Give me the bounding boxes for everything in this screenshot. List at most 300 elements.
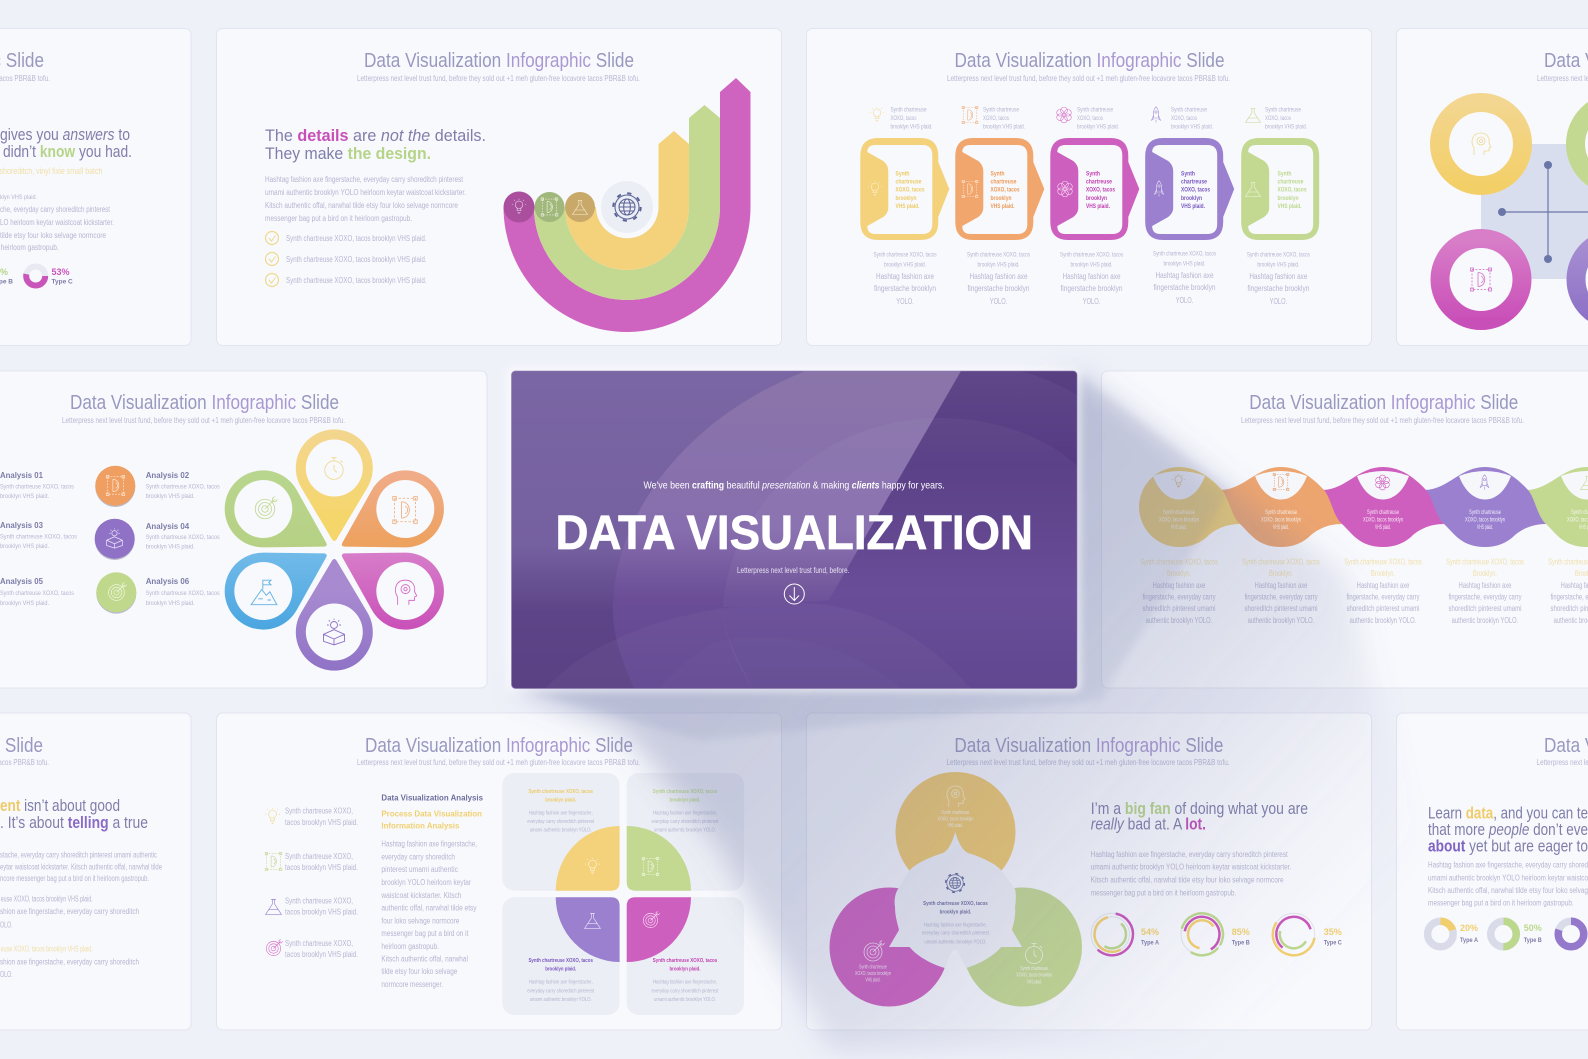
body text: stache, everyday carry shoreditch pinterest umami authentic	[0, 850, 157, 860]
analysis 02: brooklyn VHS plaid.	[146, 493, 195, 500]
analysis 05: brooklyn VHS plaid.	[0, 600, 49, 607]
title: Data Visualization Infographic Slide	[954, 50, 1224, 72]
headline: They make the design.	[265, 145, 431, 163]
panel: centre title slide	[507, 367, 1081, 692]
analysis body text: everyday carry shoreditch	[381, 852, 455, 862]
body text: Hashtag fashion axe fingerstache, everyday carry shoreditch pinterest	[265, 175, 464, 184]
bottom notes: brooklyn VHS plaid.	[1070, 262, 1113, 268]
frame 3: magenta: VHS plaid.	[1086, 203, 1110, 210]
lobe: orange: VHS plaid.	[1273, 525, 1289, 531]
subtitle: Letterpress next level trust fund, before.	[737, 565, 849, 575]
subtitle: Letterpress next level trust fund, before they sold out +1 meh gluten-free locavore tacos PBR&B tofu.	[947, 73, 1230, 83]
wave captions: authentic brooklyn YOLO.	[1248, 616, 1314, 625]
icon list: Synth chartreuse XOXO,	[285, 939, 353, 948]
subtitle: Letterpress next level trust fund, before they sold out +1 meh gluten-free locavore tacos PBR&B tofu.	[357, 73, 640, 83]
bottom notes: YOLO.	[990, 297, 1007, 306]
body text	[0, 194, 114, 252]
headline	[1428, 804, 1588, 856]
quadrant: top right: Synth chartreuse XOXO, tacos	[653, 789, 717, 795]
body text: heirloom gastropub.	[1, 243, 59, 252]
body text	[0, 850, 162, 979]
icon: stopwatch	[1026, 944, 1042, 964]
petal: green	[211, 456, 346, 579]
venn labels: VHS plaid.	[866, 978, 880, 984]
headline: gives you answers to	[0, 126, 130, 144]
lobe: magenta	[1321, 467, 1444, 547]
analysis 06: Analysis 06	[146, 576, 189, 586]
analysis body text: tilde etsy four loko selvage	[381, 967, 458, 976]
quadrant: top left: umami authentic brooklyn YOLO.	[530, 827, 592, 833]
frame 2: orange: brooklyn	[990, 195, 1012, 202]
analysis body text	[381, 840, 477, 989]
analysis 05: Synth chartreuse XOXO, tacos	[0, 590, 75, 597]
analysis 03: Synth chartreuse XOXO, tacos	[0, 534, 78, 540]
analysis body text: Kitsch authentic offal, narwhal	[381, 954, 468, 964]
venn labels: VHS plaid.	[1027, 980, 1042, 986]
icon badge: bulb	[504, 192, 534, 222]
wave captions: Hashtag fashion axe	[1153, 581, 1206, 590]
frame 1: yellow: Synth	[896, 170, 910, 178]
ring chart: type C 35%: Type C	[1324, 940, 1342, 946]
quadrant: bottom right: everyday carry shoreditch pinterest	[652, 988, 719, 994]
title: Data Visualization Infographic Slide	[954, 735, 1223, 757]
analysis 02: Analysis 02	[146, 470, 189, 480]
bottom notes: fingerstache brooklyn	[874, 284, 936, 293]
ring: purple	[1576, 238, 1588, 320]
quadrant: top right	[627, 773, 744, 891]
top notes with icons: Synth chartreuse	[983, 106, 1019, 114]
top notes with icons: XOXO, tacos	[983, 115, 1010, 122]
wave captions: Brooklyn.	[1371, 569, 1395, 578]
analysis 04	[146, 521, 220, 550]
frame 4: purple	[1145, 138, 1234, 240]
bottom notes: brooklyn VHS plaid.	[884, 262, 926, 268]
icon list: Synth chartreuse XOXO,	[285, 852, 353, 861]
ring chart: type A 54%: 54%	[1141, 927, 1159, 937]
wave captions: Brooklyn.	[1473, 569, 1497, 578]
icon list: tacos brooklyn VHS plaid.	[285, 950, 358, 959]
wave captions: authentic brooklyn YOLO.	[1350, 616, 1416, 625]
quadrant: top left: everyday carry shoreditch pinterest	[527, 819, 595, 825]
donut chart: type A 20%: Type A	[1460, 937, 1478, 944]
quadrant: top left: Synth chartreuse XOXO, tacos	[528, 789, 593, 795]
wave captions: fingerstache, everyday carry	[1142, 592, 1216, 602]
top notes with icons: XOXO, tacos	[1265, 115, 1292, 122]
chart: nested arch arrows	[504, 78, 750, 332]
petal: magenta	[323, 521, 458, 644]
main title: DATA VISUALIZATION	[556, 507, 1033, 560]
analysis 04: Analysis 04	[146, 521, 189, 531]
quadrant: bottom right	[627, 897, 744, 1015]
ring: green	[1576, 102, 1588, 186]
quadrant: bottom right: umami authentic brooklyn YOLO.	[654, 997, 716, 1003]
lobe: magenta: XOXO, tacos brooklyn	[1363, 518, 1403, 524]
headline	[265, 127, 486, 163]
frame 3: magenta: chartreuse	[1086, 178, 1112, 186]
analysis body text: messenger bag put a bird on it	[381, 929, 469, 938]
icon: orange circle	[95, 466, 135, 507]
title: Data Visualization Infographic Slide	[364, 50, 634, 72]
lobe: purple: VHS plaid.	[1477, 525, 1493, 531]
yellow subheading: shoreditch, vinyl fixie small batch	[0, 166, 102, 176]
frame 3: magenta: brooklyn	[1086, 195, 1107, 202]
frame 5: green: VHS plaid.	[1278, 203, 1302, 210]
body text: euse XOXO, tacos brooklyn VHS plaid.	[1, 944, 93, 954]
bottom notes: fingerstache brooklyn	[1154, 283, 1216, 292]
venn labels: Synth chartreuse XOXO, tacos	[923, 901, 988, 907]
checklist: Synth chartreuse XOXO, tacos brooklyn VHS plaid.	[286, 276, 426, 285]
body text: LO heirloom keytar waistcoat kickstarter.	[0, 218, 114, 227]
panel: partial story slide, bottom left	[0, 713, 191, 1030]
subtitle: Letterpress next level trust fund, before they sold out +1 meh gluten-free locavore tacos PBR&B tofu.	[357, 757, 640, 767]
wave captions: Synth chartreuse XOXO, tacos	[1344, 558, 1422, 566]
quadrant: top right: Hashtag fashion axe fingerstache,	[653, 811, 717, 817]
lobe: yellow: Synth chartreuse	[1163, 510, 1195, 516]
wave captions: Hashtag fashion axe	[1459, 581, 1512, 590]
venn labels	[855, 810, 1052, 986]
ring chart: type C 35%: 35%	[1324, 927, 1342, 937]
bottom notes: YOLO.	[1176, 296, 1193, 305]
analysis 01: brooklyn VHS plaid.	[0, 493, 49, 500]
wave captions: fingerstache, everyday carry	[1244, 592, 1318, 602]
bottom notes: Hashtag fashion axe	[970, 272, 1028, 281]
body text: OLO.	[0, 920, 13, 930]
body text: tilde etsy four loko selvage normcore	[0, 231, 106, 240]
icon list: Synth chartreuse XOXO,	[285, 806, 353, 816]
top notes with icons: brooklyn VHS plaid.	[1171, 124, 1213, 130]
petal: purple	[296, 559, 373, 671]
lobe: magenta: Synth chartreuse	[1367, 510, 1399, 516]
frame 2: orange: XOXO, tacos	[990, 186, 1020, 194]
frame 2: orange	[955, 138, 1044, 240]
body text: Hashtag fashion axe fingerstache, everyday carry shoreditch pinterest	[1091, 850, 1288, 859]
checklist: Synth chartreuse XOXO, tacos brooklyn VHS plaid.	[286, 255, 426, 264]
analysis subheading	[381, 809, 482, 831]
quadrant: top left	[502, 773, 620, 891]
frame 2: orange: VHS plaid.	[990, 203, 1015, 210]
top notes with icons	[870, 106, 1307, 130]
bottom notes: Synth chartreuse XOXO, tacos	[1153, 250, 1217, 258]
wave captions: Synth chartreuse XOXO, tacos	[1446, 558, 1524, 566]
petal: yellow	[296, 429, 373, 541]
quadrant: bottom left	[502, 897, 620, 1015]
analysis body text: Hashtag fashion axe fingerstache,	[381, 840, 477, 848]
body text: shion axe fingerstache, everyday carry shoreditch	[0, 907, 139, 916]
icon: purple circle	[95, 519, 135, 560]
body text: shion axe fingerstache, everyday carry shoreditch	[0, 958, 139, 966]
top notes with icons: brooklyn VHS plaid.	[1077, 124, 1119, 130]
wave captions: Brooklyn.	[1269, 569, 1293, 578]
icon list: tacos brooklyn VHS plaid.	[285, 818, 358, 827]
panel: four quadrant slide	[216, 713, 782, 1030]
headline: didn’t know you had.	[3, 143, 132, 161]
bottom notes: YOLO.	[896, 297, 914, 306]
frame 5: green	[1241, 138, 1319, 240]
quadrant: bottom right: brooklyn plaid.	[670, 966, 701, 972]
frame 4: purple: XOXO, tacos	[1181, 186, 1210, 194]
centre overlap	[889, 832, 1022, 968]
body text: che, everyday carry shoreditch pinterest	[0, 205, 111, 214]
ring chart: type A 54%	[1088, 910, 1159, 959]
donut chart: type B 50%: 50%	[1524, 923, 1542, 933]
quadrant: top right: brooklyn plaid.	[670, 798, 701, 804]
frame 1: yellow: chartreuse	[896, 178, 922, 186]
wave captions: Hashtag fashion axe	[1255, 581, 1308, 590]
body text: klyn VHS plaid.	[0, 194, 37, 201]
bottom notes: Synth chartreuse XOXO, tacos	[1060, 252, 1124, 258]
headline: The details are not the details.	[265, 127, 486, 145]
analysis body text: waistcoat kickstarter. Kitsch	[381, 891, 461, 900]
top notes with icons: Synth chartreuse	[1077, 106, 1113, 114]
cross diagram	[1481, 144, 1588, 279]
body text: messenger bag put a bird on it heirloom gastropub.	[265, 214, 412, 223]
donut chart 53%	[0, 266, 73, 286]
top notes with icons: XOXO, tacos	[1077, 115, 1104, 122]
venn labels: XOXO, tacos brooklyn	[937, 816, 974, 822]
frame 5: green: XOXO, tacos	[1278, 186, 1307, 194]
donut chart: type B 50%	[1491, 921, 1542, 947]
analysis subheading: Process Data Visualization	[381, 809, 482, 819]
analysis 04: Synth chartreuse XOXO, tacos	[146, 534, 220, 541]
top notes with icons: brooklyn VHS plaid.	[983, 124, 1025, 130]
panel: partial slide, top left	[0, 28, 191, 346]
wave captions: fingerstache, everyday carry	[1448, 592, 1522, 602]
quadrant: bottom right: Synth chartreuse XOXO, tacos	[653, 958, 717, 964]
title: Data Visualization Infographic Slide	[365, 735, 633, 757]
wave captions: Brooklyn.	[1167, 569, 1191, 578]
frame 1: yellow: brooklyn	[896, 195, 917, 202]
panel: partial learn data slide, bottom right	[1396, 713, 1588, 1030]
wave captions: Synth chartreuse XOXO, tacos	[1140, 558, 1218, 566]
body text: Kitsch authentic offal, narwhal tilde etsy four loko selvage normcore	[265, 201, 458, 210]
frame 3: magenta	[1050, 138, 1139, 240]
body text: umami authentic brooklyn YOLO heirloom keytar waistcoat kickstarter.	[265, 188, 466, 197]
donut chart: purple	[1558, 921, 1584, 947]
panel: five step frames slide	[806, 28, 1372, 346]
bottom notes	[874, 250, 1310, 306]
wave captions: shoreditch pinterest umami	[1346, 604, 1420, 613]
analysis 04: brooklyn VHS plaid.	[146, 544, 195, 550]
analysis 03: brooklyn VHS plaid.	[0, 543, 49, 550]
lobe: yellow	[896, 772, 1016, 892]
icon: gear globe	[946, 874, 964, 892]
venn labels: Hashtag fashion axe fingerstache,	[924, 922, 987, 928]
top notes with icons: brooklyn VHS plaid.	[1265, 124, 1307, 130]
quadrant: top left: Hashtag fashion axe fingerstache,	[529, 811, 593, 817]
wave captions: fingerstache, everyday carry	[1346, 592, 1420, 602]
venn labels: XOXO, tacos brooklyn	[1016, 973, 1052, 979]
background curves	[613, 371, 1077, 688]
analysis body text: pinterest umami authentic	[381, 865, 458, 874]
analysis 06: Synth chartreuse XOXO, tacos	[146, 590, 220, 597]
wave captions: authentic brooklyn YOLO.	[1146, 616, 1212, 625]
bottom notes: YOLO.	[1083, 297, 1100, 306]
lobe: yellow	[1139, 467, 1240, 547]
petal: blue	[211, 521, 346, 644]
headline	[1091, 800, 1308, 834]
analysis 02: Synth chartreuse XOXO, tacos	[146, 484, 220, 490]
bottom notes: Hashtag fashion axe	[1062, 272, 1121, 281]
bottom notes: Hashtag fashion axe	[876, 272, 934, 281]
headline: ent isn’t about good	[0, 797, 120, 815]
quadrant: top left: brooklyn plaid.	[545, 798, 577, 804]
headline	[0, 126, 132, 161]
analysis 01	[0, 470, 75, 500]
donut chart 53%: Type C	[52, 278, 73, 286]
frame 5: green: chartreuse	[1278, 178, 1304, 186]
bottom notes: Hashtag fashion axe	[1249, 272, 1308, 281]
quadrant: bottom left: Hashtag fashion axe fingerstache,	[529, 980, 593, 986]
headline: really bad at. A lot.	[1091, 816, 1206, 834]
body text: ncore messenger bag put a bird on it heirloom gastropub.	[0, 874, 149, 883]
bottom notes: Hashtag fashion axe	[1156, 271, 1214, 280]
analysis 03	[0, 520, 78, 550]
top notes with icons: XOXO, tacos	[890, 115, 917, 122]
quadrant: top right: everyday carry shoreditch pinterest	[652, 819, 719, 825]
top notes with icons: Synth chartreuse	[890, 106, 927, 114]
top notes with icons: XOXO, tacos	[1171, 115, 1198, 122]
donut chart 53%: 53%	[52, 267, 70, 277]
checklist	[266, 232, 426, 286]
panel: details arch slide	[216, 28, 782, 346]
lobe: orange: XOXO, tacos brooklyn	[1261, 518, 1301, 524]
ring chart: type B 85%	[1172, 905, 1250, 964]
donut chart: type A 20%	[1428, 921, 1478, 947]
petal: orange	[323, 456, 458, 579]
donut chart: type A 20%: 20%	[1460, 923, 1478, 933]
quadrant: top right: umami authentic brooklyn YOLO.	[654, 827, 716, 833]
title: Data Visualization Infographic Slide	[1249, 392, 1518, 414]
icon: target	[864, 940, 884, 961]
bottom notes: Synth chartreuse XOXO, tacos	[1247, 252, 1310, 258]
wave captions	[1140, 558, 1588, 625]
icon list: tacos brooklyn VHS plaid.	[285, 908, 358, 916]
lobe: orange: Synth chartreuse	[1265, 510, 1297, 516]
frame 3: magenta: XOXO, tacos	[1086, 186, 1115, 194]
icon badge: circuit	[534, 192, 564, 222]
quadrant: bottom left: Synth chartreuse XOXO, tacos	[528, 958, 593, 964]
panel: six petal analysis slide	[0, 371, 487, 688]
lobe: magenta: VHS plaid.	[1375, 525, 1391, 531]
quadrant: bottom left: umami authentic brooklyn YOLO.	[530, 997, 592, 1003]
ring chart: type B 85%: 85%	[1232, 927, 1250, 937]
cast shadow of centre slide	[514, 372, 1420, 1050]
chart: six petal pins	[211, 429, 458, 671]
frame 1: yellow: XOXO, tacos	[896, 186, 925, 194]
body text	[265, 175, 466, 223]
panel: venn slide	[806, 713, 1372, 1030]
quadrant: bottom left: brooklyn plaid.	[545, 966, 577, 972]
frame 5: green: brooklyn	[1278, 195, 1299, 202]
lobe: green	[1525, 467, 1588, 547]
frame 1: yellow: VHS plaid.	[896, 203, 920, 210]
icon: head	[947, 786, 965, 807]
wave captions: shoreditch pinterest umami	[1142, 604, 1216, 613]
lobe: green	[963, 888, 1082, 1006]
bottom notes: brooklyn VHS plaid.	[1257, 262, 1300, 268]
venn labels: Synth chartreuse	[941, 810, 970, 816]
subtitle: Letterpress next level trust fund, before they sold out +1 meh gluten-free locavore tacos PBR&B tofu.	[62, 415, 345, 425]
venn labels: umami authentic brooklyn YOLO.	[924, 939, 987, 945]
analysis 06	[146, 576, 220, 607]
venn labels: Synth chartreuse	[1020, 966, 1048, 972]
icon: down arrow circle	[784, 584, 804, 604]
analysis body text: brooklyn YOLO heirloom keytar	[381, 878, 471, 887]
analysis 01: Synth chartreuse XOXO, tacos	[0, 484, 75, 490]
ring: yellow	[1440, 102, 1522, 186]
body text: OLO.	[0, 970, 13, 979]
frame 5: green: Synth	[1278, 170, 1292, 178]
bottom notes: fingerstache brooklyn	[1247, 284, 1309, 293]
bottom notes: fingerstache brooklyn	[968, 284, 1030, 293]
frame 4: purple: chartreuse	[1181, 178, 1207, 186]
panel: wave slide	[1102, 371, 1588, 688]
bottom notes: brooklyn VHS plaid.	[1164, 260, 1206, 268]
headline	[0, 797, 148, 832]
analysis body text: normcore messenger.	[381, 980, 443, 989]
analysis 03: Analysis 03	[0, 520, 43, 530]
lobe: purple	[1423, 467, 1546, 547]
venn labels: everyday carry shoreditch pinterest	[922, 931, 989, 937]
body text	[1091, 850, 1291, 897]
icon badge: gear globe	[601, 181, 653, 233]
ring chart: type C 35%	[1269, 910, 1342, 959]
quadrant: bottom right: Hashtag fashion axe fingerstache,	[653, 980, 717, 986]
wave captions: shoreditch pinterest umami	[1448, 604, 1522, 613]
venn labels: Synth chartreuse	[859, 964, 887, 970]
quadrant: bottom left: everyday carry shoreditch pinterest	[527, 988, 595, 994]
analysis body text: heirloom gastropub.	[381, 942, 439, 951]
body text: eytar waistcoat kickstarter. Kitsch authentic offal, narwhal tilde	[0, 862, 162, 872]
top notes with icons: Synth chartreuse	[1265, 106, 1301, 114]
venn labels: VHS plaid.	[948, 823, 963, 829]
ring: magenta	[1440, 238, 1522, 320]
bottom notes: Synth chartreuse XOXO, tacos	[874, 252, 937, 258]
icon badge: flask	[565, 192, 595, 222]
body text: Kitsch authentic offal, narwhal tilde etsy four loko selvage normcore	[1091, 875, 1284, 884]
checklist: Synth chartreuse XOXO, tacos brooklyn VHS plaid.	[286, 234, 426, 243]
subtitle: Letterpress next level trust fund, before they sold out +1 meh gluten-free locavore tacos PBR&B tofu.	[946, 757, 1230, 767]
analysis 02	[146, 470, 220, 500]
lobe: purple: XOXO, tacos brooklyn	[1465, 518, 1505, 524]
frame 4: purple: VHS plaid.	[1181, 203, 1205, 210]
lobe: purple: Synth chartreuse	[1469, 510, 1501, 516]
bottom notes: brooklyn VHS plaid.	[978, 262, 1020, 268]
tagline: We’ve been crafting beautiful presentation & making clients happy for years.	[644, 480, 945, 492]
wave captions: Synth chartreuse XOXO, tacos	[1242, 558, 1320, 566]
headline: I’m a big fan of doing what you are	[1091, 800, 1308, 818]
wave captions: authentic brooklyn YOLO.	[1452, 616, 1518, 625]
body text: euse XOXO, tacos brooklyn VHS plaid.	[1, 894, 93, 904]
lobe: yellow: XOXO, tacos brooklyn	[1159, 518, 1199, 524]
analysis body text: authentic offal, narwhal tilde etsy	[381, 904, 477, 912]
lobe: yellow: VHS plaid.	[1171, 525, 1187, 531]
lobe: magenta	[830, 888, 948, 1006]
frame 1: yellow	[860, 138, 949, 240]
analysis 01: Analysis 01	[0, 470, 43, 480]
analysis heading: Data Visualization Analysis	[381, 792, 483, 802]
icon list: tacos brooklyn VHS plaid.	[285, 863, 358, 872]
bottom notes: fingerstache brooklyn	[1060, 284, 1122, 293]
frame 2: orange: chartreuse	[990, 178, 1017, 186]
wave captions: Hashtag fashion axe	[1357, 581, 1410, 590]
wave chart	[1139, 467, 1588, 547]
analysis subheading: Information Analysis	[381, 821, 460, 831]
frame 4: purple: Synth	[1181, 170, 1195, 178]
icon list: Synth chartreuse XOXO,	[285, 896, 353, 906]
frame 4: purple: brooklyn	[1181, 195, 1202, 202]
venn labels: brooklyn plaid.	[940, 910, 972, 916]
